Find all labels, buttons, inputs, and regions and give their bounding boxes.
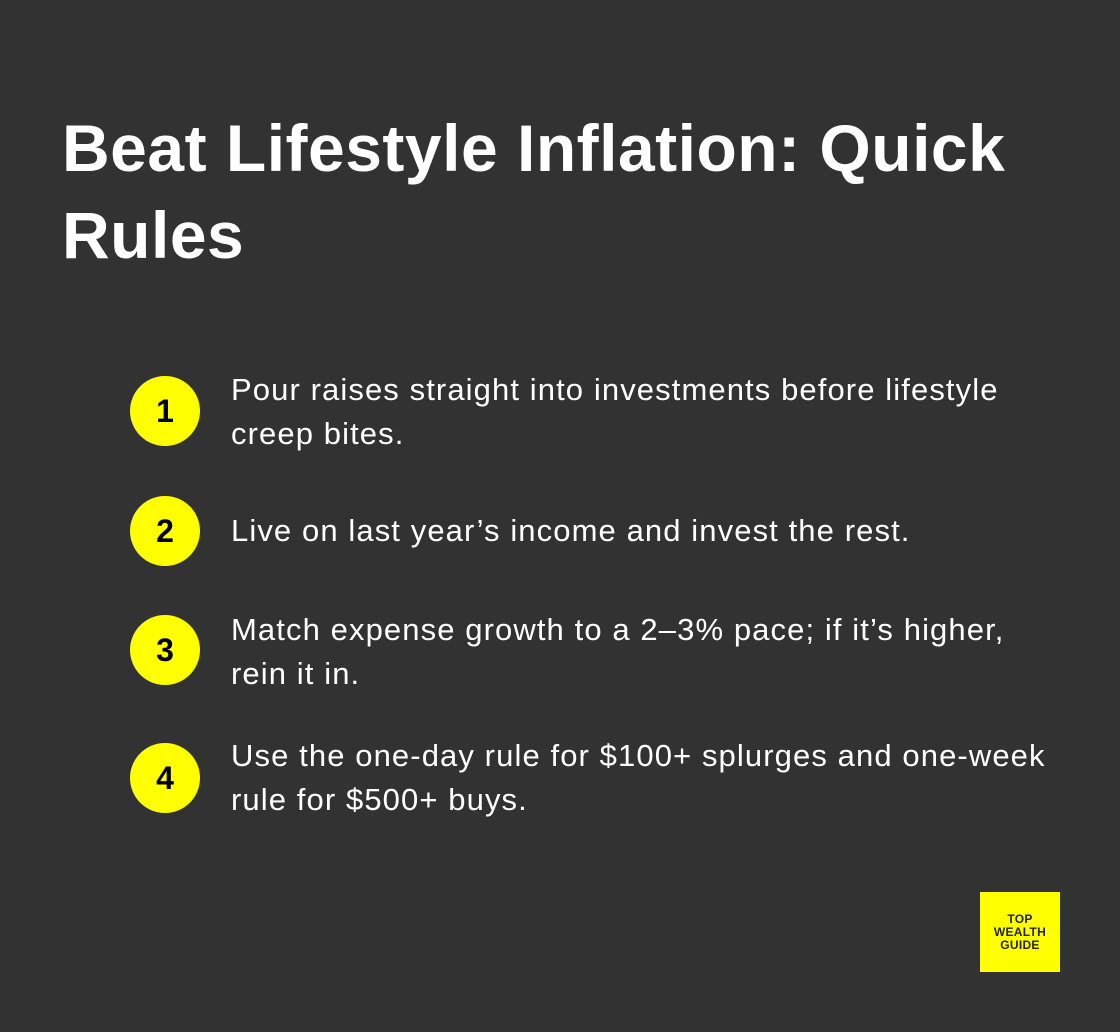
badge 2: [130, 496, 200, 566]
badge 3: 3: [156, 632, 174, 668]
title: [62, 111, 1005, 272]
text 3: [231, 612, 1004, 691]
title: Rules: [62, 198, 244, 272]
rule 3: [130, 612, 1004, 691]
text 4: [231, 738, 1046, 817]
rule 1: [130, 372, 999, 451]
text 1: [231, 372, 999, 451]
rule 4: [130, 738, 1046, 817]
text 2: Live on last year’s income and invest the rest.: [231, 513, 910, 548]
text 1: Pour raises straight into investments before lifestyle: [231, 372, 999, 407]
badge 4: [130, 743, 200, 813]
badge 1: [130, 376, 200, 446]
badge 2: 2: [156, 513, 174, 549]
text 4: Use the one-day rule for $100+ splurges and one-week: [231, 738, 1046, 773]
title: Beat Lifestyle Inflation: Quick: [62, 111, 1005, 185]
logo: TOP: [1007, 912, 1033, 926]
badge 1: 1: [156, 393, 174, 429]
text 3: Match expense growth to a 2–3% pace; if it’s higher,: [231, 612, 1004, 647]
badge 4: 4: [156, 760, 174, 796]
logo: [980, 892, 1060, 972]
logo: WEALTH: [994, 924, 1046, 938]
text 3: rein it in.: [231, 656, 360, 691]
text 4: rule for $500+ buys.: [231, 782, 528, 817]
rule 2: [130, 496, 910, 566]
badge 3: [130, 615, 200, 685]
logo: GUIDE: [1000, 938, 1040, 952]
text 1: creep bites.: [231, 416, 404, 451]
